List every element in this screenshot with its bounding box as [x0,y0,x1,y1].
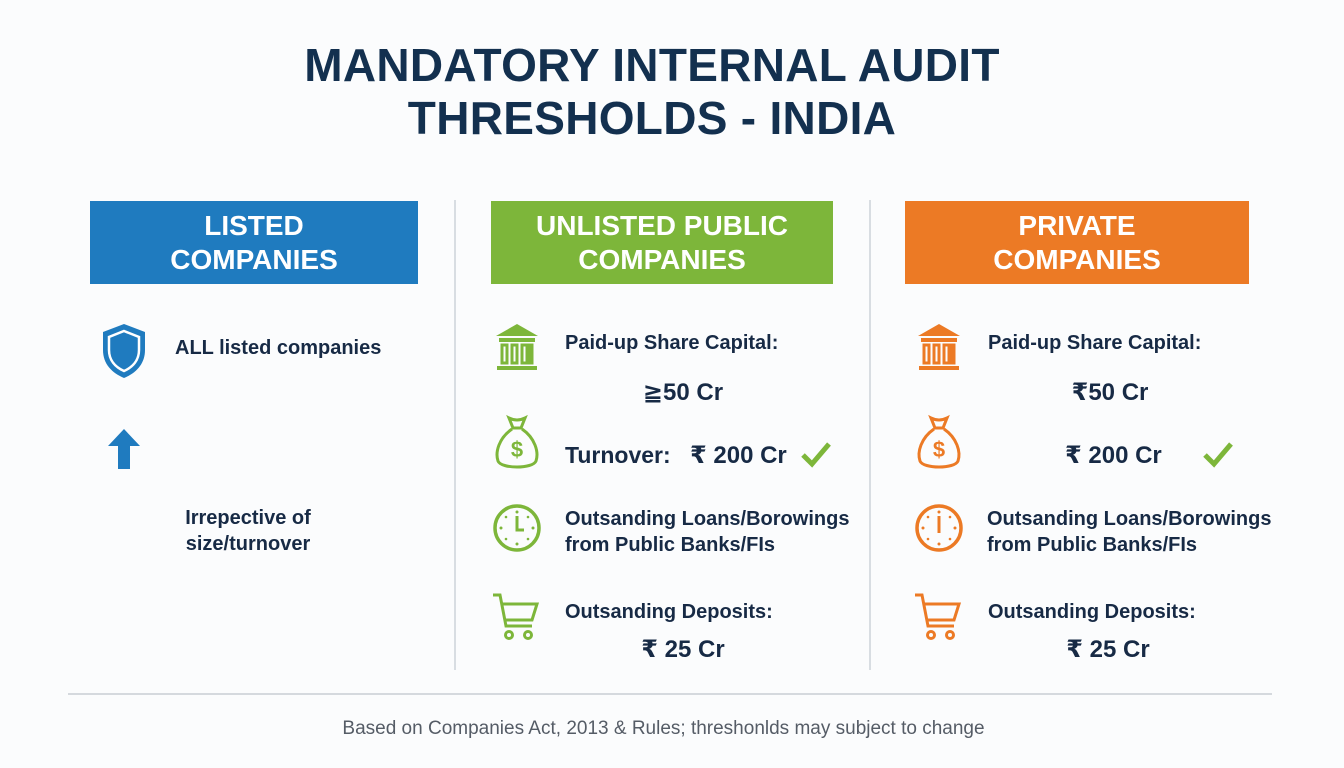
text: loans: from Public Banks/FIs [565,534,775,556]
text: deposits: Outsanding Deposits: [988,601,1196,623]
icon: check [1203,442,1233,468]
footer note: Based on Companies Act, 2013 & Rules; threshonlds may subject to change [342,718,985,739]
icon: money bag [496,414,538,468]
header: unlisted public companies: COMPANIES [578,244,746,274]
icon: bank [496,324,538,370]
icon: bank [918,324,960,370]
text: paid-up: Paid-up Share Capital: [565,332,778,354]
title: THRESHOLDS - INDIA [408,92,896,144]
text: loans: Outsanding Loans/Borowings [987,508,1271,530]
value: 25 cr: ₹ 25 Cr [1066,636,1150,663]
header: listed companies: LISTED [204,210,304,240]
icon: clock [493,504,541,552]
value: 200 cr: ₹ 200 Cr [1065,442,1162,469]
header: private companies: COMPANIES [993,244,1161,274]
text: all listed: ALL listed companies [175,337,381,359]
text: loans [987,508,1271,556]
panel: unlisted public [493,324,849,663]
icon: clock [915,504,963,552]
icon: shield [103,324,145,378]
text: irrespective [185,507,311,555]
value: 50 cr: ≧50 Cr [643,379,723,406]
text: loans: from Public Banks/FIs [987,534,1197,556]
icon: money bag [918,414,960,468]
title [304,39,1000,144]
icon: money bag: $ [511,437,523,462]
icon: check [801,442,831,468]
value: 200 cr: ₹ 200 Cr [690,442,787,469]
text: deposits: Outsanding Deposits: [565,601,773,623]
icon: cart [493,594,539,640]
text: loans [565,508,849,556]
text: loans: Outsanding Loans/Borowings [565,508,849,530]
icon: cart [915,594,961,640]
icon: money bag: $ [933,437,945,462]
value: 50 cr: ₹50 Cr [1072,379,1148,406]
value: 25 cr: ₹ 25 Cr [641,636,725,663]
text: irrespective: size/turnover [186,533,310,555]
header: unlisted public companies: UNLISTED PUBLIC [536,210,788,240]
panel: listed [103,324,381,555]
text: turnover: Turnover: [565,442,671,468]
panel: private [915,324,1271,663]
header: private companies: PRIVATE [1018,210,1136,240]
text: irrespective: Irrepective of [185,507,311,529]
header: listed companies: COMPANIES [170,244,338,274]
title: MANDATORY INTERNAL AUDIT [304,39,1000,91]
icon: arrow up [108,429,140,469]
header: private companies [905,201,1249,284]
header: listed companies [90,201,418,284]
header: unlisted public companies [491,201,833,284]
text: paid-up: Paid-up Share Capital: [988,332,1201,354]
